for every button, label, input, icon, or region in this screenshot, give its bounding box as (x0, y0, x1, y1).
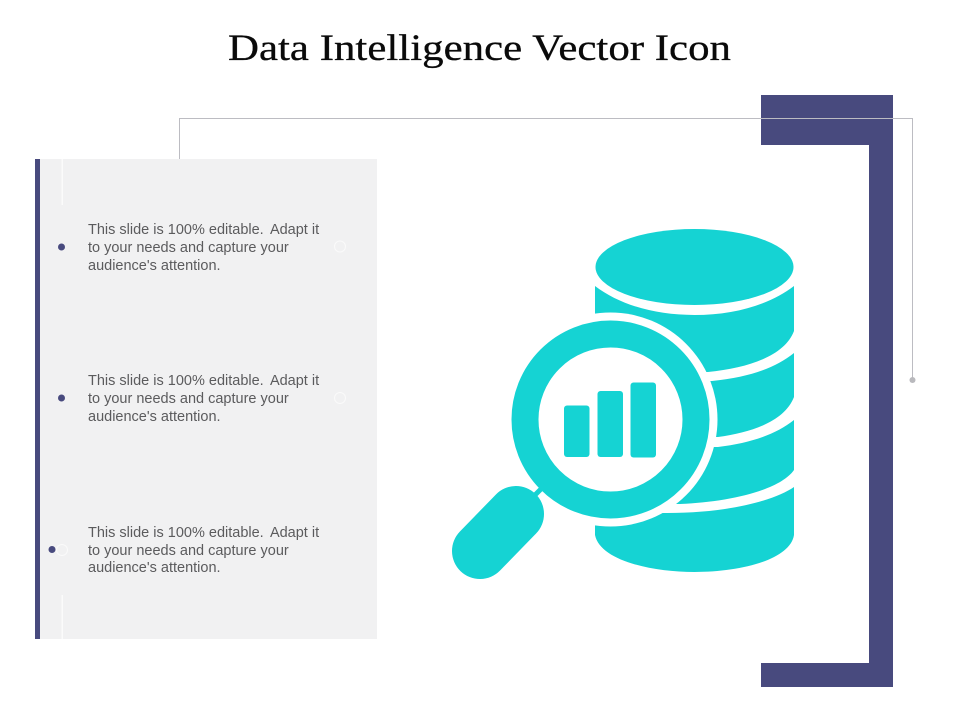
database tier 2 (690, 353, 794, 437)
database tier 3 (670, 420, 794, 504)
database top disc (596, 229, 794, 305)
panel: text list (35, 159, 377, 639)
icon: database with magnifier (480, 229, 794, 572)
magnifier handle (480, 514, 516, 551)
list item 1: This slide is 100% editable. Adapt it (88, 222, 319, 238)
list item 3: This slide is 100% editable. Adapt it (88, 525, 319, 541)
title: Data Intelligence Vector Icon (228, 28, 731, 69)
frame bracket (761, 95, 893, 687)
list item 2: audience's attention. (88, 409, 221, 425)
database tier 1 (595, 286, 794, 372)
magnifier neck (533, 485, 545, 497)
magnifier lens ring (525, 334, 696, 505)
list item 2: This slide is 100% editable. Adapt it (88, 373, 319, 389)
list item 3: to your needs and capture your (88, 543, 289, 559)
magnifier halo (504, 312, 718, 526)
database tier 4 (595, 487, 794, 572)
list item 2 (58, 373, 346, 425)
list item 2: to your needs and capture your (88, 391, 289, 407)
list item 3: audience's attention. (88, 560, 221, 576)
bar chart (564, 382, 656, 458)
list item 1: audience's attention. (88, 258, 221, 274)
list item 3 (48, 525, 319, 576)
list item 1: to your needs and capture your (88, 240, 289, 256)
list item 1 (58, 222, 346, 274)
connector line with end dot (180, 118, 916, 383)
